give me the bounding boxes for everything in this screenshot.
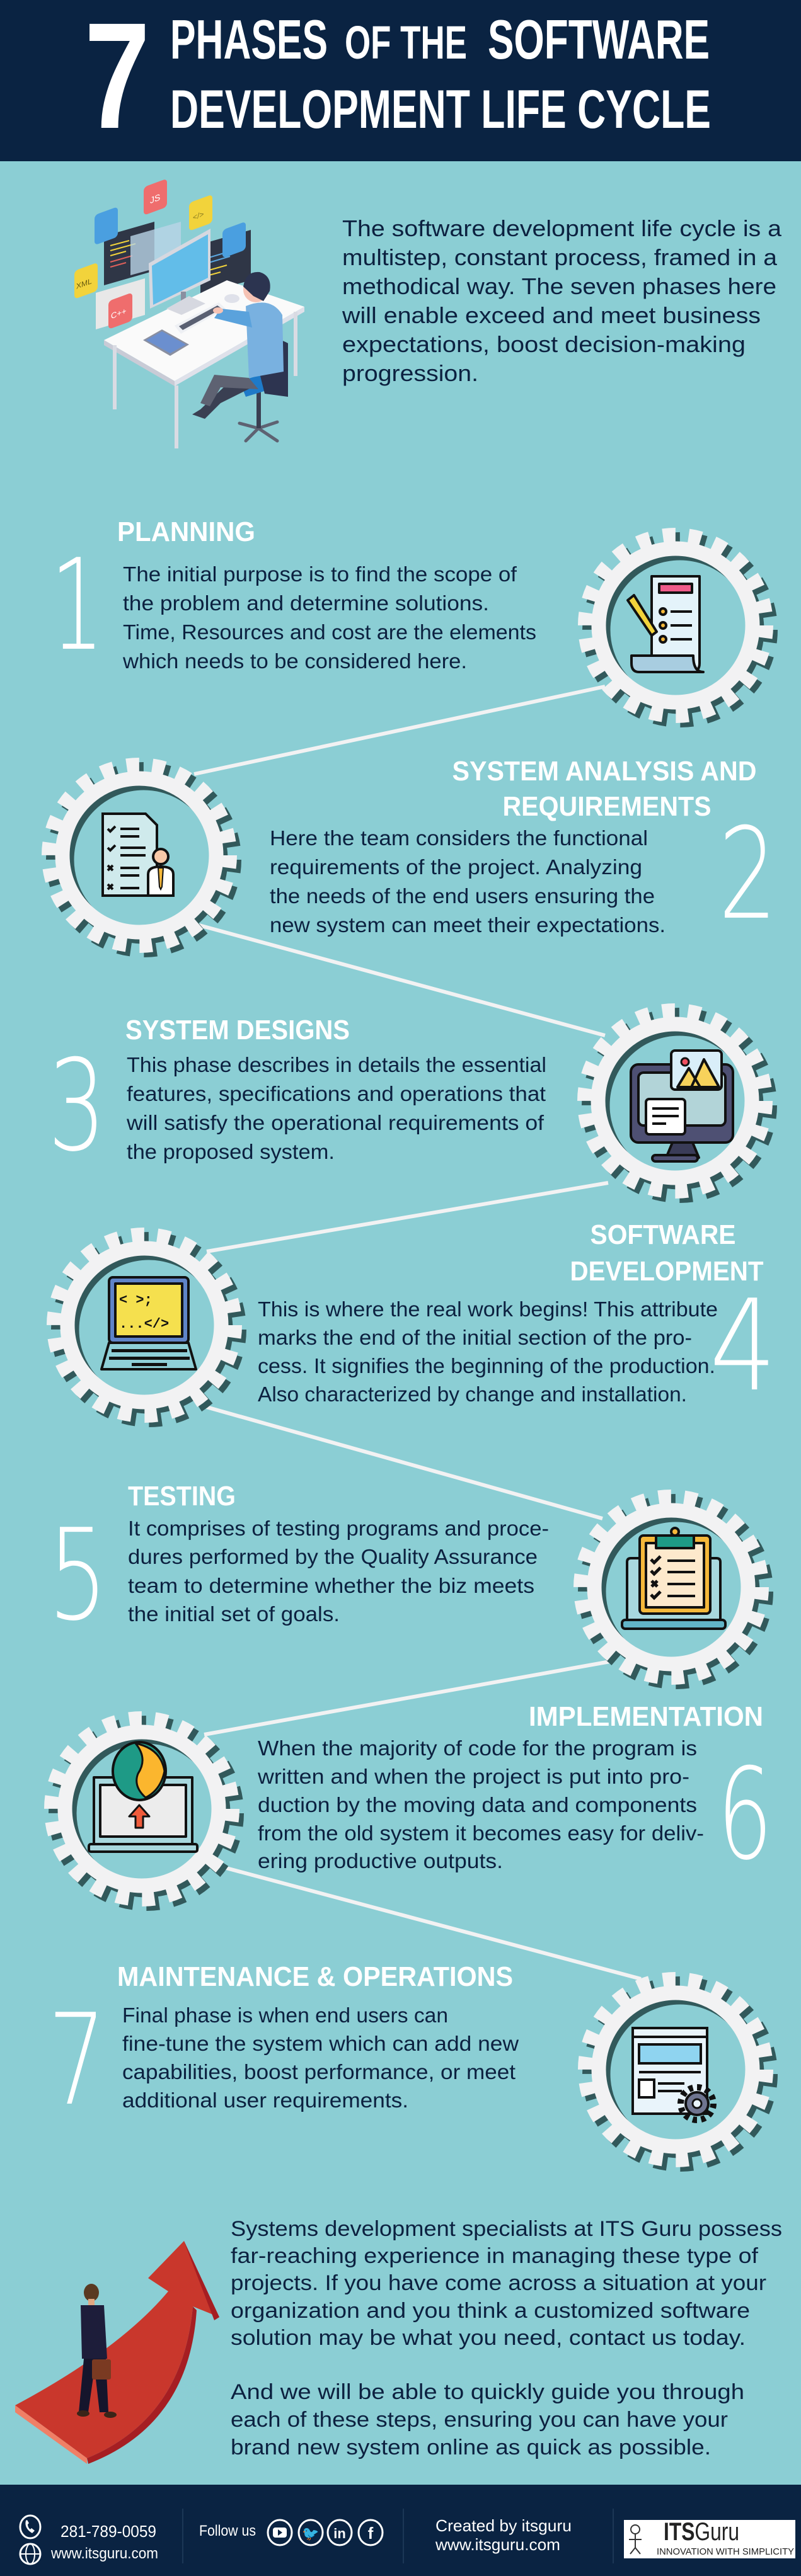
- contact: phone: 281-789-0059: [61, 2522, 156, 2541]
- social icons: in: [333, 2526, 346, 2541]
- text 2: the needs of the end users ensuring the: [270, 884, 655, 908]
- intro paragraph: progression.: [342, 360, 478, 386]
- numeral 4: 4: [710, 1273, 776, 1420]
- text 6: duction by the moving data and components: [258, 1793, 697, 1816]
- phase 2: system analysis: [49, 756, 777, 950]
- numeral 2: 2: [718, 801, 777, 948]
- gear 5 with clipboard icon: [581, 1497, 766, 1682]
- text 1: which needs to be considered here.: [122, 649, 467, 673]
- text 6: [257, 1736, 704, 1872]
- title line 1: [170, 8, 710, 71]
- footer: [0, 2485, 801, 2576]
- gear 7 with browser settings icon: [585, 1980, 770, 2164]
- desk: [104, 280, 304, 381]
- tablet: [143, 329, 189, 356]
- text 3: This phase describes in details the essential: [127, 1053, 546, 1076]
- text 7: fine-tune the system which can add new: [122, 2032, 519, 2055]
- text 2: requirements of the project. Analyzing: [270, 855, 642, 879]
- intro paragraph: will enable exceed and meet business: [342, 302, 761, 328]
- gear 6 with deploy icon: [52, 1719, 236, 1903]
- keyboard: [175, 302, 226, 334]
- call to action text: [231, 2217, 782, 2459]
- contact: phone: [20, 2516, 156, 2541]
- text 3: will satisfy the operational requirements of: [126, 1111, 545, 1134]
- text 7: Final phase is when end users can: [122, 2003, 448, 2027]
- intro paragraph: multistep, constant process, framed in a: [342, 244, 778, 270]
- mouse: [224, 294, 239, 303]
- illustration: developer at desk: </>: [193, 210, 204, 222]
- header band: [0, 0, 801, 161]
- social icons: f: [368, 2524, 374, 2543]
- numeral 3: 3: [48, 1033, 106, 1180]
- title line 1: SOFTWARE: [488, 8, 710, 71]
- heading 1: PLANNING: [117, 516, 255, 547]
- text 4: [258, 1297, 718, 1406]
- text 4: marks the end of the initial section of the pro-: [258, 1326, 692, 1349]
- call to action text: And we will be able to quickly guide you through: [231, 2380, 744, 2404]
- phase 6: implementation: [52, 1701, 773, 1903]
- call to action text: solution may be what you need, contact us today.: [231, 2326, 746, 2350]
- floating tiles: [95, 207, 118, 245]
- heading 2: REQUIREMENTS: [503, 791, 711, 822]
- text 5: the initial set of goals.: [128, 1602, 340, 1626]
- text 3: the proposed system.: [127, 1140, 335, 1163]
- text 6: ering productive outputs.: [258, 1849, 503, 1872]
- text 6: from the old system it becomes easy for deliv-: [258, 1821, 704, 1845]
- gear 3 with design icon: [585, 1011, 769, 1195]
- text 6: written and when the project is put into pro-: [257, 1765, 689, 1788]
- text 5: It comprises of testing programs and proce-: [128, 1517, 549, 1540]
- intro paragraph: The software development life cycle is a: [342, 215, 782, 241]
- numeral 1: 1: [50, 532, 104, 679]
- code panels: [104, 222, 154, 285]
- numeral 6: 6: [717, 1741, 773, 1888]
- created by: www.itsguru.com: [435, 2535, 560, 2554]
- created by: [435, 2516, 572, 2554]
- businessman: [77, 2284, 117, 2418]
- text 2: new system can meet their expectations.: [270, 913, 666, 937]
- heading 5: TESTING: [128, 1481, 236, 1512]
- intro paragraph: methodical way. The seven phases here: [342, 273, 776, 299]
- created by: Created by itsguru: [435, 2516, 572, 2535]
- heading 2: [452, 756, 756, 822]
- gear 4 with laptop code icon: < >;: [119, 1292, 153, 1308]
- text 3: features, specifications and operations that: [127, 1082, 546, 1105]
- connector lines: [194, 687, 641, 1979]
- title line 1: PHASES: [170, 8, 328, 71]
- call to action text: organization and you think a customized software: [231, 2299, 750, 2323]
- social icons: 🐦: [302, 2526, 320, 2542]
- text 5: team to determine whether the biz meets: [128, 1574, 534, 1597]
- text 1: Time, Resources and cost are the elements: [123, 620, 536, 644]
- heading 3: SYSTEM DESIGNS: [125, 1015, 350, 1046]
- text 7: [122, 2003, 519, 2112]
- logo: INNOVATION WITH SIMPLICITY: [657, 2546, 794, 2557]
- illustration: developer at desk: C++: [111, 306, 127, 321]
- heading 6: IMPLEMENTATION: [529, 1701, 763, 1732]
- heading 4: [570, 1219, 764, 1287]
- monitor: [149, 229, 210, 309]
- call to action text: Systems development specialists at ITS Guru possess: [231, 2217, 782, 2241]
- heading 4: SOFTWARE: [590, 1219, 736, 1250]
- text 5: [128, 1517, 549, 1626]
- illustration: developer at desk: XML: [76, 276, 92, 291]
- person: [192, 384, 252, 419]
- intro paragraph: [342, 215, 782, 386]
- gear 2 with requirements icon: [49, 765, 234, 950]
- call to action text: each of these steps, ensuring you can have your: [231, 2408, 728, 2432]
- illustration: developer at desk: JS: [150, 193, 160, 206]
- phase 4: software development: [54, 1219, 776, 1420]
- call to action text: far-reaching experience in managing these type of: [231, 2244, 759, 2268]
- chair: [239, 422, 277, 441]
- text 6: When the majority of code for the program is: [258, 1736, 697, 1760]
- illustration: developer at desk: [74, 179, 304, 448]
- call to action text: brand new system online as quick as possible.: [231, 2436, 711, 2459]
- gear 4 with laptop code icon: ...</>: [119, 1316, 169, 1332]
- heading 4: DEVELOPMENT: [570, 1256, 764, 1287]
- gear 1 with planning icon: [585, 535, 770, 720]
- text 2: [270, 826, 666, 937]
- text 4: Also characterized by change and installation.: [258, 1382, 687, 1406]
- logo: ITSGuru: [664, 2518, 739, 2546]
- text 7: additional user requirements.: [122, 2089, 408, 2112]
- title line 1: OF THE: [345, 16, 467, 69]
- logo: [624, 2518, 795, 2558]
- phase 7: maintenance: [48, 1961, 770, 2164]
- numeral 5: 5: [48, 1502, 108, 1649]
- call to action: arrow and businessman: [15, 2241, 219, 2464]
- gear 4 with laptop code icon: [54, 1235, 239, 1420]
- social icons: [199, 2520, 383, 2545]
- phase 3: system designs: [48, 1011, 769, 1195]
- call to action text: projects. If you have come across a situation at your: [231, 2271, 766, 2295]
- text 1: [122, 562, 536, 673]
- contact: website: [20, 2544, 158, 2564]
- heading 2: SYSTEM ANALYSIS AND: [452, 756, 756, 787]
- text 7: capabilities, boost performance, or meet: [122, 2060, 516, 2083]
- text 5: dures performed by the Quality Assurance: [128, 1545, 538, 1568]
- phase 1: planning: [50, 516, 770, 720]
- heading 7: MAINTENANCE & OPERATIONS: [117, 1961, 513, 1992]
- text 4: This is where the real work begins! This attribute: [258, 1297, 718, 1321]
- text 1: the problem and determine solutions.: [123, 591, 489, 615]
- numeral 7: 7: [48, 1987, 106, 2134]
- text 1: The initial purpose is to find the scope of: [123, 562, 517, 586]
- text 3: [126, 1053, 546, 1163]
- contact: website: www.itsguru.com: [50, 2545, 158, 2562]
- social icons: Follow us: [199, 2522, 256, 2539]
- text 4: cess. It signifies the beginning of the production.: [258, 1354, 715, 1377]
- text 2: Here the team considers the functional: [270, 826, 648, 850]
- intro paragraph: expectations, boost decision-making: [342, 331, 746, 357]
- phase 5: testing: [48, 1481, 766, 1682]
